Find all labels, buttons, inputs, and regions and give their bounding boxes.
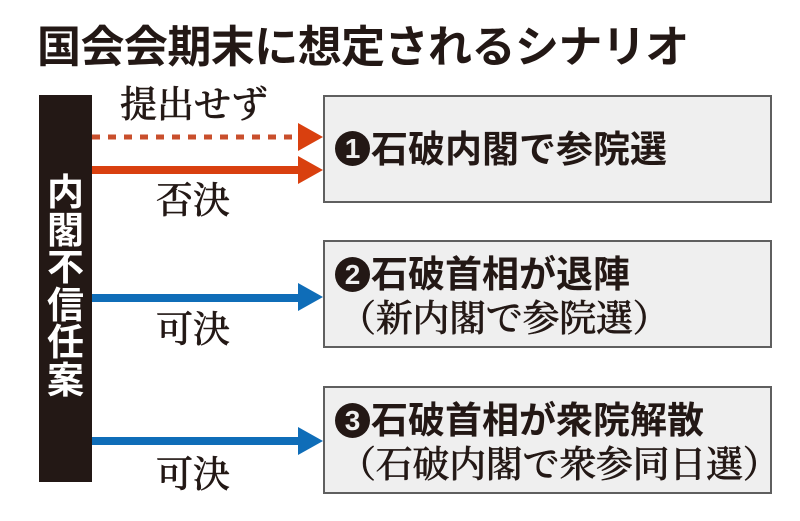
panel: scenario 1 — [323, 95, 772, 203]
panel: scenario 3 — [323, 386, 772, 494]
label: rejected: 否決 — [156, 181, 230, 222]
arrow: not submitted — [92, 123, 323, 151]
scenario 3 note: （石破内閣で衆参同日選） — [339, 445, 779, 486]
label: not submitted: 提出せず — [120, 85, 268, 126]
number badge 2: 2 — [345, 259, 360, 290]
number badge 3: 3 — [345, 405, 360, 436]
label: passed 2: 可決 — [156, 455, 230, 496]
scenario 3 heading: 石破首相が衆院解散 — [371, 400, 704, 441]
arrow: passed 1 — [92, 283, 323, 311]
bar label: 内閣不信任案 — [47, 172, 84, 400]
number badge 3 — [335, 403, 370, 438]
panel: scenario 2 — [323, 240, 772, 348]
number badge 1: 1 — [345, 133, 360, 164]
arrow: passed 2 — [92, 427, 323, 455]
number badge 1 — [335, 131, 370, 166]
left bar: no-confidence motion — [39, 95, 92, 482]
number badge 2 — [335, 257, 370, 292]
label: passed 1: 可決 — [156, 310, 230, 351]
arrow: rejected — [92, 156, 323, 184]
scenario 2 note: （新内閣で参院選） — [339, 299, 669, 340]
scenario 1 heading: 石破内閣で参院選 — [371, 129, 667, 170]
scenario 2 heading: 石破首相が退陣 — [371, 254, 630, 295]
title: 国会会期末に想定されるシナリオ — [37, 23, 689, 72]
